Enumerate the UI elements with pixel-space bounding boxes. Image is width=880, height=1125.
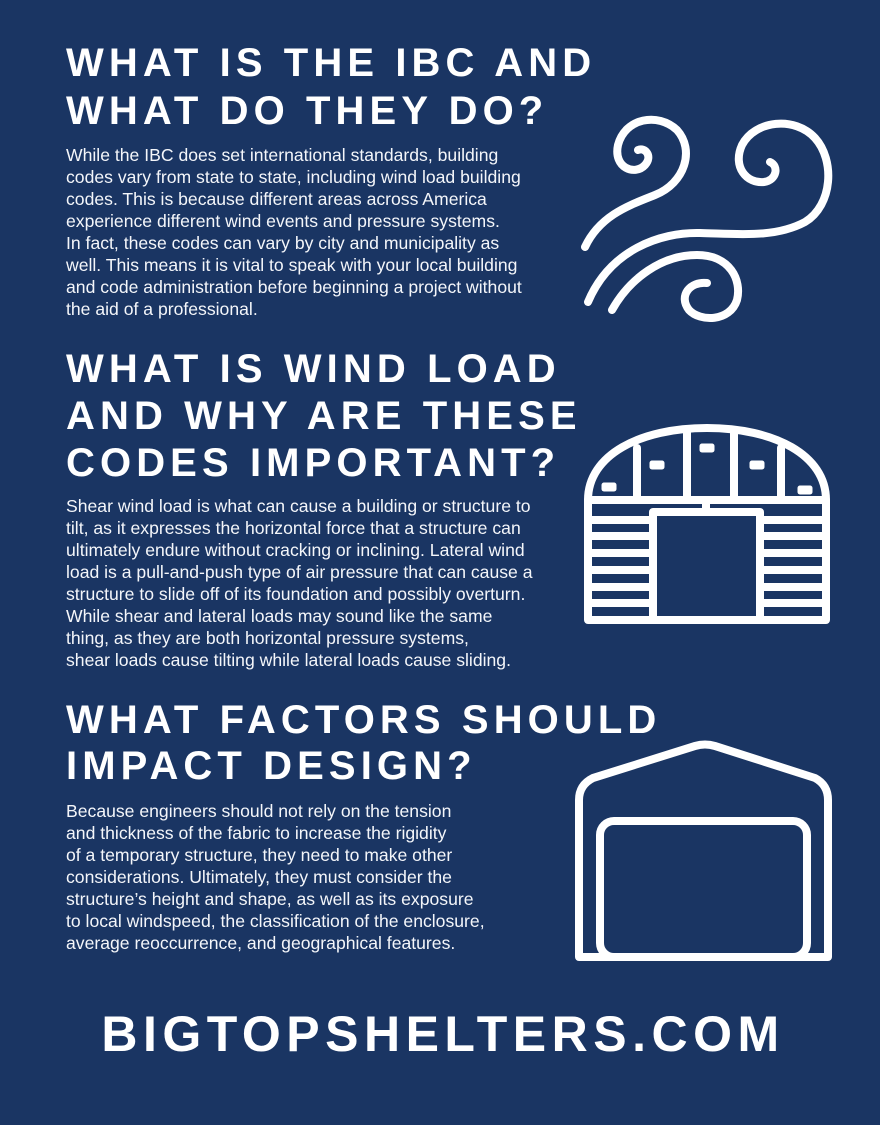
text block: factors: of a temporary structure, they need to make other — [66, 845, 452, 865]
heading: factors: WHAT FACTORS SHOULD — [66, 698, 661, 742]
text block: factors: average reoccurrence, and geographical features. — [66, 933, 455, 953]
heading: what is the IBC: WHAT DO THEY DO? — [66, 89, 548, 133]
icon: quonset shelter — [588, 428, 826, 620]
text block: wind load: While shear and lateral loads may sound like the same — [66, 606, 492, 626]
text block: IBC: well. This means it is vital to speak with your local building — [66, 255, 517, 275]
text block: factors: to local windspeed, the classification of the enclosure, — [66, 911, 485, 931]
text block: IBC: While the IBC does set international standards, building — [66, 145, 498, 165]
heading: what is the IBC — [66, 41, 596, 133]
text block: factors: Because engineers should not rely on the tension — [66, 801, 451, 821]
text block: wind load: ultimately endure without cracking or inclining. Lateral wind — [66, 540, 525, 560]
text block: wind load: load is a pull-and-push type of air pressure that can cause a — [66, 562, 533, 582]
heading: factors — [66, 698, 661, 788]
text block: IBC: the aid of a professional. — [66, 299, 258, 319]
icon: wind swirls — [585, 120, 828, 318]
text block: wind load — [66, 496, 533, 670]
heading: what is wind load: AND WHY ARE THESE — [66, 394, 582, 438]
footer: website: BIGTOPSHELTERS.COM — [101, 1006, 785, 1062]
text block: wind load: tilt, as it expresses the horizontal force that a structure can — [66, 518, 521, 538]
heading: what is wind load: WHAT IS WIND LOAD — [66, 347, 561, 391]
text block: factors — [66, 801, 485, 953]
text block: factors: structure’s height and shape, as well as its exposure — [66, 889, 474, 909]
text block: wind load: Shear wind load is what can cause a building or structure to — [66, 496, 531, 516]
text block: IBC — [66, 145, 522, 319]
heading: factors: IMPACT DESIGN? — [66, 744, 477, 788]
text block: wind load: structure to slide off of its foundation and possibly overturn. — [66, 584, 525, 604]
text block: factors: and thickness of the fabric to increase the rigidity — [66, 823, 446, 843]
text block: wind load: shear loads cause tilting while lateral loads cause sliding. — [66, 650, 511, 670]
text block: IBC: codes. This is because different areas across America — [66, 189, 487, 209]
text block: IBC: In fact, these codes can vary by city and municipality as — [66, 233, 499, 253]
icon: gable shelter — [579, 744, 828, 957]
heading: what is wind load — [66, 347, 582, 485]
text block: IBC: and code administration before beginning a project without — [66, 277, 522, 297]
heading: what is the IBC: WHAT IS THE IBC AND — [66, 41, 596, 85]
text block: wind load: thing, as they are both horizontal pressure systems, — [66, 628, 469, 648]
text block: factors: considerations. Ultimately, they must consider the — [66, 867, 452, 887]
text block: IBC: codes vary from state to state, including wind load building — [66, 167, 521, 187]
text block: IBC: experience different wind events and pressure systems. — [66, 211, 500, 231]
heading: what is wind load: CODES IMPORTANT? — [66, 441, 560, 485]
